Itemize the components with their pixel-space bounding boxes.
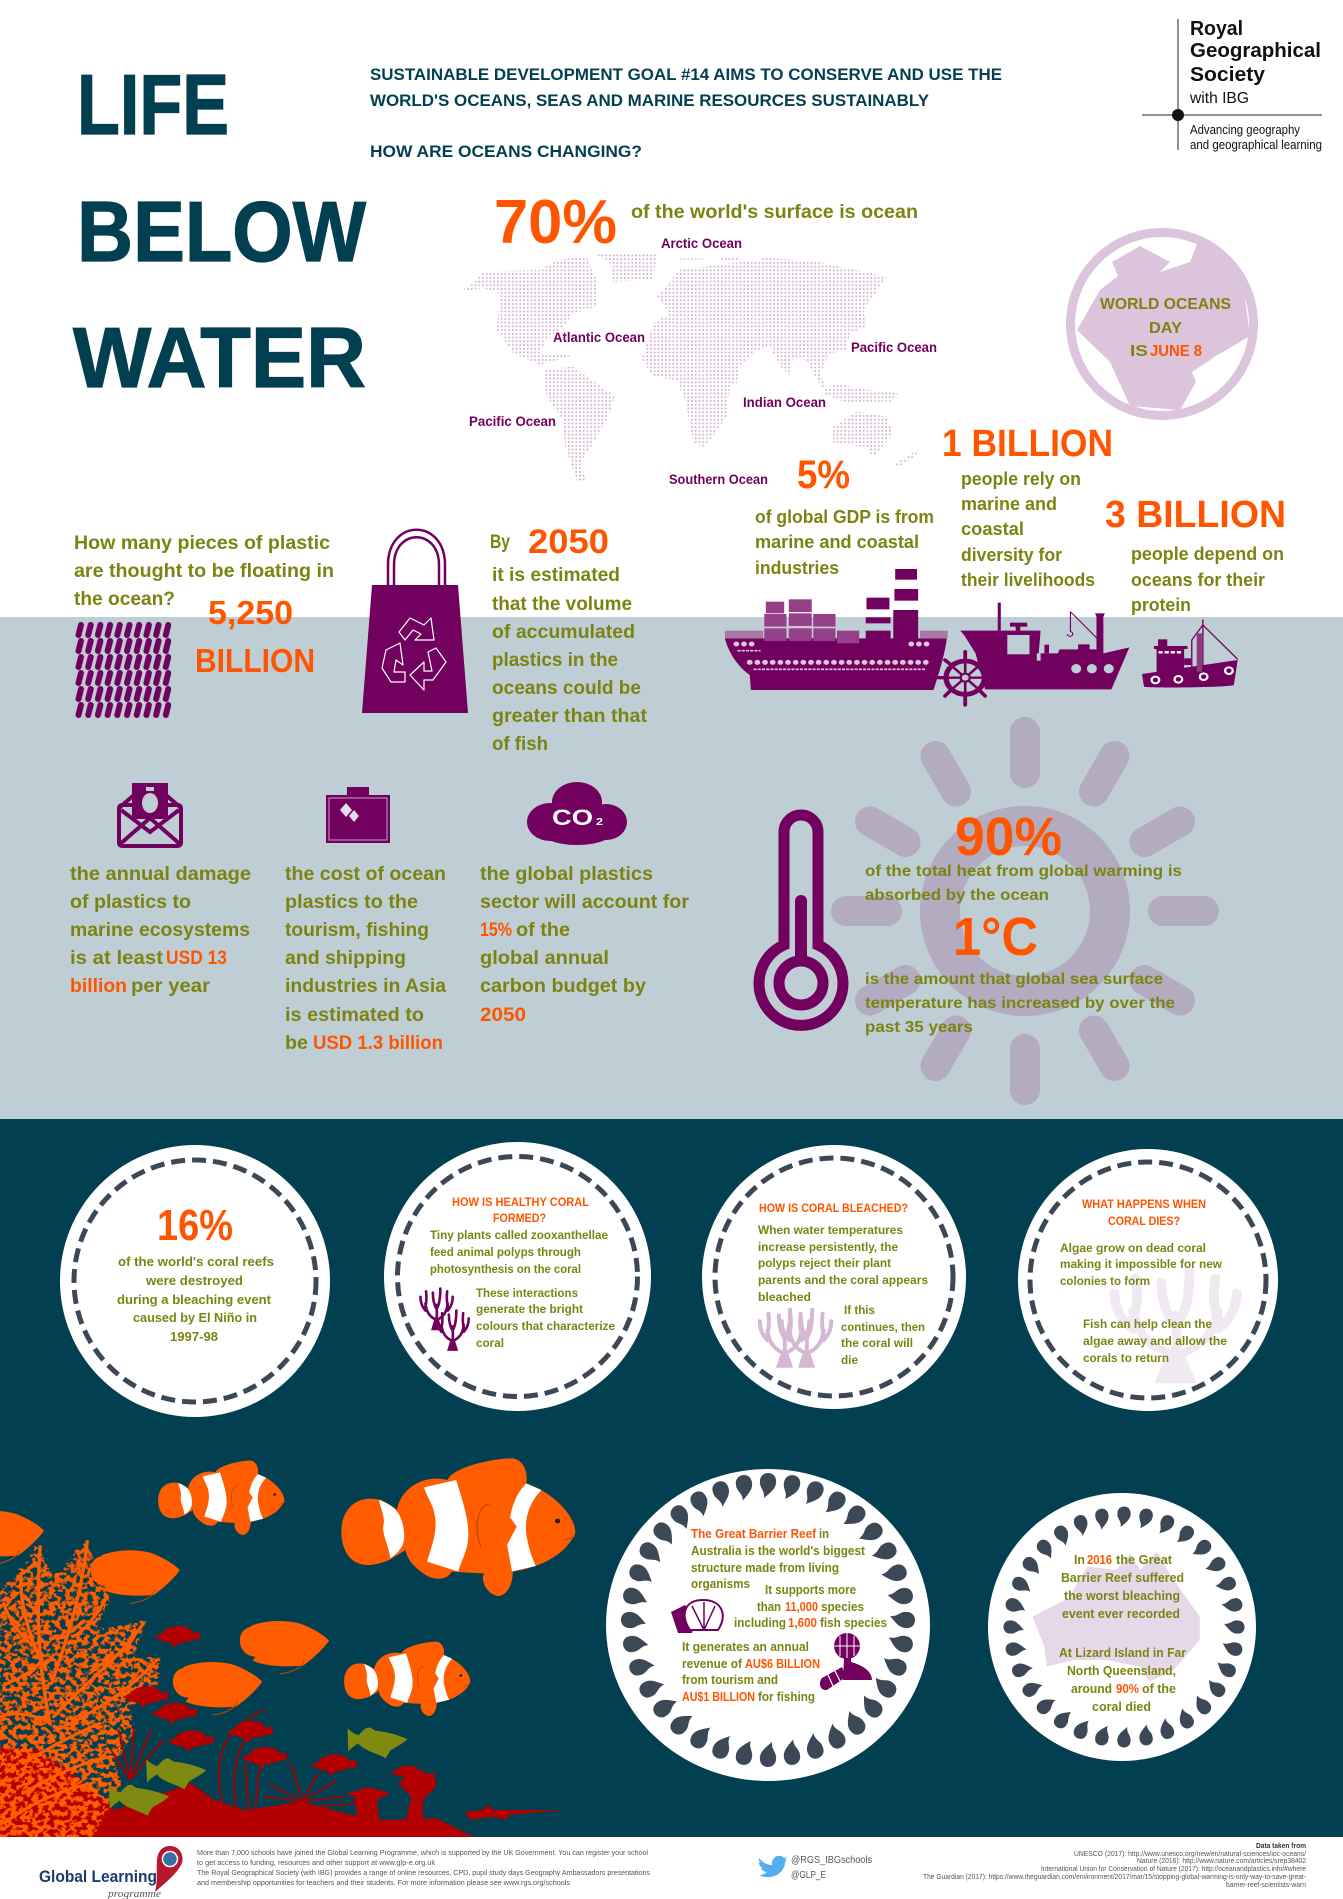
stat: 1 degree C: temperature has increased by over the [865,995,1175,1012]
globe: world oceans day: IS [1130,343,1148,360]
reef text: fish species [820,1615,887,1630]
plastic question: BILLION [195,642,315,679]
reef text: revenue of [682,1656,743,1671]
stat: 90% heat [865,807,1182,904]
stat: 5% GDP: of global GDP is from [755,507,934,527]
stat: by 2050 plastics: oceans could be [492,678,641,699]
title [73,58,367,406]
text: plastics carbon budget: of the [516,920,570,941]
circle: what happens when coral dies: Algae grow on dead coral [1060,1241,1206,1255]
ocean labels: Arctic Ocean [661,236,742,251]
title: LIFE [77,58,229,153]
icon: purple coral [420,1289,469,1351]
logo: Royal Geographical Society: and geographical learning [1190,138,1322,152]
teardrop ring [1003,1506,1245,1748]
circle: how is healthy coral formed: FORMED? [493,1211,546,1225]
reef text [682,1526,887,1704]
logo: Global Learning Programme [39,1846,183,1899]
reef text: than [757,1599,781,1614]
reef text: organisms [691,1576,750,1591]
data sources [923,1843,1307,1889]
circle: how is coral bleached [702,1145,966,1409]
stat: 1 degree C [865,907,1175,1036]
circle: what happens when coral dies: algae away and allow the [1083,1334,1227,1348]
bleaching text: event ever recorded [1062,1606,1180,1621]
background band: grey ocean [0,617,1343,1119]
text: cost of ocean plastics [285,864,446,1054]
plastic question [74,533,334,679]
stat: by 2050 plastics: that the volume [492,594,632,615]
stat: 3 billion: oceans for their [1131,570,1265,590]
bleaching text: of the [1142,1681,1176,1696]
bleaching text: In [1074,1552,1085,1567]
circle: how is healthy coral formed [384,1142,651,1411]
circle: what happens when coral dies: making it impossible for new [1060,1257,1223,1271]
stat: 90% heat: of the total heat from global warming is [865,863,1182,880]
stat: 90% heat: absorbed by the ocean [865,887,1049,904]
reef text: 11,000 [785,1599,818,1614]
stat: 70% ocean: of the world's surface is ocean [631,202,918,223]
text: annual damage of plastics: per year [131,976,211,997]
circle: how is healthy coral formed: These interactions [476,1286,578,1300]
text: plastics carbon budget [480,864,690,1026]
globe: world oceans day [1066,228,1258,420]
logo: Global Learning Programme: Global Learning [39,1868,157,1886]
stat: 90% heat: 90% [955,807,1062,867]
logo: Royal Geographical Society: Royal [1190,18,1243,40]
text: cost of ocean plastics: and shipping [285,948,406,969]
icon: suitcase [326,787,390,843]
globe: world oceans day: WORLD OCEANS [1100,296,1231,313]
circle: 16% of coral reefs: were destroyed [145,1273,243,1288]
plastic question: How many pieces of plastic [74,533,330,554]
text: plastics carbon budget: 15% [480,920,512,941]
bleaching text: 90% [1116,1681,1139,1696]
bleaching text: Barrier Reef suffered [1061,1570,1184,1585]
text: annual damage of plastics [70,864,251,997]
stat: by 2050 plastics: greater than that [492,706,648,727]
stat: 5% GDP: marine and coastal [755,532,919,552]
icon: small boat [1142,619,1238,687]
icon: ship wheel [938,652,995,705]
bleaching text: the Great [1116,1552,1173,1567]
stat: by 2050 plastics: 2050 [528,523,609,561]
text: cost of ocean plastics: plastics to the [285,892,418,913]
circle: how is coral bleached: increase persistently, the [758,1240,898,1254]
stat: 3 billion [1105,494,1286,615]
text: annual damage of plastics: USD 13 [166,948,227,969]
circle: how is healthy coral formed: photosynthesis on the coral [430,1262,581,1276]
title: WATER [73,311,366,406]
ocean labels: Pacific Ocean [851,340,937,355]
social handles: @GLP_E [791,1869,826,1881]
circle: Great Barrier Reef [606,1469,930,1781]
subtitle: WORLD'S OCEANS, SEAS AND MARINE RESOURCES SUSTAINABLY [370,91,930,110]
icon: shells [671,1600,723,1633]
reef text: 1,600 [788,1615,817,1630]
reef text: It generates an annual [682,1639,809,1654]
stat: 1 billion: marine and [961,494,1057,514]
bleaching text: 2016 [1087,1552,1112,1567]
ocean labels: Indian Ocean [743,395,826,410]
text: cost of ocean plastics: be [285,1033,308,1054]
data sources: Data taken from [1256,1843,1306,1850]
logo: Royal Geographical Society: with IBG [1189,90,1249,107]
circle: how is healthy coral formed: Tiny plants called zooxanthellae [430,1228,608,1242]
logo: Royal Geographical Society: Advancing geography [1190,123,1301,137]
text: plastics carbon budget: sector will account for [480,892,690,913]
text: annual damage of plastics: billion [70,976,127,997]
plastic question: 5,250 [208,594,293,631]
icon: envelope with banknote [119,783,181,846]
subtitle: HOW ARE OCEANS CHANGING? [370,142,642,161]
reef text: including [734,1615,786,1630]
circle: how is coral bleached: continues, then [841,1320,925,1334]
circle: how is healthy coral formed: HOW IS HEALTHY CORAL [452,1195,589,1209]
circle: how is coral bleached: the coral will [841,1336,913,1350]
bleaching text: North Queensland, [1067,1663,1176,1678]
stat: 70% ocean [494,188,918,257]
stat: by 2050 plastics: By [490,532,510,553]
data sources: UNESCO (2017): http://www.unesco.org/new/en/natural-sciences/ioc-oceans/ [1074,1851,1306,1858]
plain orange fish [0,1511,329,1715]
text: annual damage of plastics: of plastics to [70,892,191,913]
bleaching text [1059,1552,1186,1714]
text: cost of ocean plastics: industries in Asia [285,976,446,997]
circle: how is coral bleached: polyps reject their plant [758,1256,891,1270]
logo: Royal Geographical Society: Geographical [1190,40,1321,62]
text: annual damage of plastics: the annual damage [70,864,251,885]
bleaching text: around [1071,1681,1112,1696]
ocean labels [469,236,937,487]
data sources: barrier-reef-scientists-warn [1226,1882,1306,1889]
text: cost of ocean plastics: is estimated to [285,1005,424,1026]
icon: bleached coral [760,1310,831,1368]
text: cost of ocean plastics: the cost of ocean [285,864,446,885]
reef text: Australia is the world's biggest [691,1543,866,1558]
social handles: @RGS_IBGschools [791,1854,872,1866]
circle: what happens when coral dies: WHAT HAPPENS WHEN [1082,1197,1206,1211]
dotted world map [460,253,917,482]
circle: how is healthy coral formed: feed animal polyps through [430,1245,581,1259]
globe: world oceans day: JUNE 8 [1150,343,1202,360]
title: BELOW [77,185,367,280]
circle: what happens when coral dies [1018,1149,1278,1411]
reef text: structure made from living [691,1560,839,1575]
bleaching text: At Lizard Island in Far [1059,1645,1186,1660]
icon: twitter bird [759,1856,787,1877]
stat: by 2050 plastics: of accumulated [492,622,635,643]
icon: CO2 cloud: 2 [596,817,604,828]
reef illustration: coral and fish [0,1458,575,1840]
circle: what happens when coral dies: Fish can help clean the [1083,1317,1212,1331]
circle: how is coral bleached: If this [844,1303,875,1317]
ocean labels: Pacific Ocean [469,414,556,429]
map of Australia [1032,1552,1200,1682]
circle: how is coral bleached: When water temperatures [758,1223,903,1237]
text: cost of ocean plastics: tourism, fishing [285,920,429,941]
reef text: species [821,1599,864,1614]
circle: 16% of coral reefs: during a bleaching event [117,1292,272,1307]
stat: 3 billion: 3 BILLION [1105,494,1286,536]
icon: thermometer [759,815,843,1025]
orange branching coral [0,1540,161,1840]
social handles [791,1854,872,1881]
reef text: AU$1 BILLION [682,1689,755,1704]
olive fish [109,1727,408,1816]
data sources: International Union for Conservation of Nature (2017): http://oceanandplastics.info/#where [1041,1866,1306,1873]
clownfish: large [341,1458,575,1596]
plastic question: the ocean? [74,589,175,610]
stat: 1 billion: their livelihoods [961,570,1095,590]
bleaching text: the worst bleaching [1064,1588,1180,1603]
circle: 16% of coral reefs: caused by El Niño in [133,1310,257,1325]
background band: deep teal [0,1119,1343,1837]
text: plastics carbon budget: carbon budget by [480,976,646,997]
data sources: Nature (2016): http://www.nature.com/articles/srep38402 [1137,1858,1306,1865]
ocean labels: Atlantic Ocean [553,330,645,345]
icon: recycling bag [362,530,468,713]
reef text: AU$6 BILLION [745,1656,820,1671]
icon: grid of plastic bottles [75,622,171,718]
sea fan and anemones [111,1710,356,1810]
circle: what happens when coral dies: CORAL DIES? [1108,1214,1180,1228]
logo: Royal Geographical Society: Society [1190,64,1266,86]
stat: 5% GDP [755,453,934,578]
stat: 5% GDP: 5% [797,453,850,497]
circle: how is healthy coral formed: coral [476,1336,504,1350]
icon: CO2 cloud [527,782,627,845]
icon: CO2 cloud: CO [552,805,593,830]
stat: 1 billion: coastal [961,519,1024,539]
circle: what happens when coral dies: colonies to form [1060,1274,1150,1288]
clownfish: lower [344,1642,470,1716]
footer text: about the programme: to get access to funding, resources and other support at www.glp-e.org.uk [197,1858,435,1867]
stat: by 2050 plastics: plastics in the [492,650,618,671]
reef base [0,1747,475,1837]
circle: how is coral bleached: bleached [758,1290,811,1304]
footer text: about the programme: More than 7,000 schools have joined the Global Learning Programme, which is supported by the UK Government. You can register your school [197,1848,648,1857]
reef text: The Great Barrier Reef [691,1526,817,1541]
stat: 1 degree C: is the amount that global sea surface [865,971,1163,988]
circle: 16% of coral reefs [60,1145,330,1417]
stat: 1 degree C: 1°C [953,907,1038,967]
stat: 70% ocean: 70% [494,188,617,257]
circle: how is coral bleached: die [841,1353,858,1367]
circle: 16% of coral reefs: of the world's coral reefs [118,1254,274,1269]
reef text: in [819,1526,829,1541]
icon: sun [846,732,1204,1090]
globe: world oceans day: DAY [1149,320,1182,337]
text: plastics carbon budget: global annual [480,948,609,969]
logo: Royal Geographical Society [1142,18,1322,152]
text: annual damage of plastics: is at least [70,948,164,969]
icon: faded coral [1114,1270,1237,1383]
footer background [0,1837,1343,1899]
circle: how is coral bleached: HOW IS CORAL BLEACHED? [759,1201,908,1215]
stat: 3 billion: protein [1131,595,1191,615]
stat: by 2050 plastics: of fish [492,734,548,755]
circle: how is coral bleached: parents and the coral appears [758,1273,928,1287]
teardrop ring [621,1473,915,1767]
ocean labels: Southern Ocean [669,472,768,487]
stat: by 2050 plastics: it is estimated [492,565,620,586]
circle: 16% of coral reefs: 1997-98 [170,1329,218,1344]
red fish shoal [122,1626,423,1780]
circle: 16% of coral reefs: 16% [157,1201,233,1250]
text: plastics carbon budget: the global plastics [480,864,653,885]
circle: how is healthy coral formed: generate the bright [476,1302,583,1316]
icon: cargo ship [725,569,948,690]
circle: what happens when coral dies: corals to return [1083,1351,1169,1365]
clownfish: top [158,1461,284,1535]
subtitle [370,65,1002,161]
text: cost of ocean plastics: USD 1.3 billion [313,1033,443,1054]
stat: 1 billion: 1 BILLION [942,423,1113,465]
plastic question: are thought to be floating in [74,561,334,582]
footer text: about the programme [197,1848,650,1887]
reef text: for fishing [758,1689,815,1704]
circle: how is healthy coral formed: colours that characterize [476,1319,615,1333]
stat: 3 billion: people depend on [1131,544,1284,564]
footer text: about the programme: and membership opportunities for teachers and their students. For more information please see www.rgs.org/schools [197,1878,570,1887]
data sources: The Guardian (2017): https://www.theguardian.com/environment/2017/mar/15/stopping-global-warming-is-only-way-to-save-great- [923,1874,1307,1881]
text: annual damage of plastics: marine ecosystems [70,920,250,941]
stat: 1 billion: people rely on [961,469,1081,489]
subtitle: SUSTAINABLE DEVELOPMENT GOAL #14 AIMS TO CONSERVE AND USE THE [370,65,1002,84]
footer text: about the programme: The Royal Geographical Society (with IBG) provides a range of online resources, CPD, pupil study days Geography Ambassadors presentations [197,1868,650,1877]
text: plastics carbon budget: 2050 [480,1005,526,1026]
stat: 1 degree C: past 35 years [865,1019,973,1036]
stat: by 2050 plastics [490,523,648,755]
icon: diver with camera [820,1633,872,1690]
stat: 1 billion: diversity for [961,545,1062,565]
stat: 5% GDP: industries [755,558,839,578]
icon: fishing boat [960,603,1129,689]
reef text: from tourism and [682,1672,778,1687]
reef text: It supports more [765,1582,856,1597]
bleaching text: coral died [1092,1699,1151,1714]
circle: 2016 bleaching [988,1493,1256,1761]
stat: 1 billion [942,423,1113,590]
